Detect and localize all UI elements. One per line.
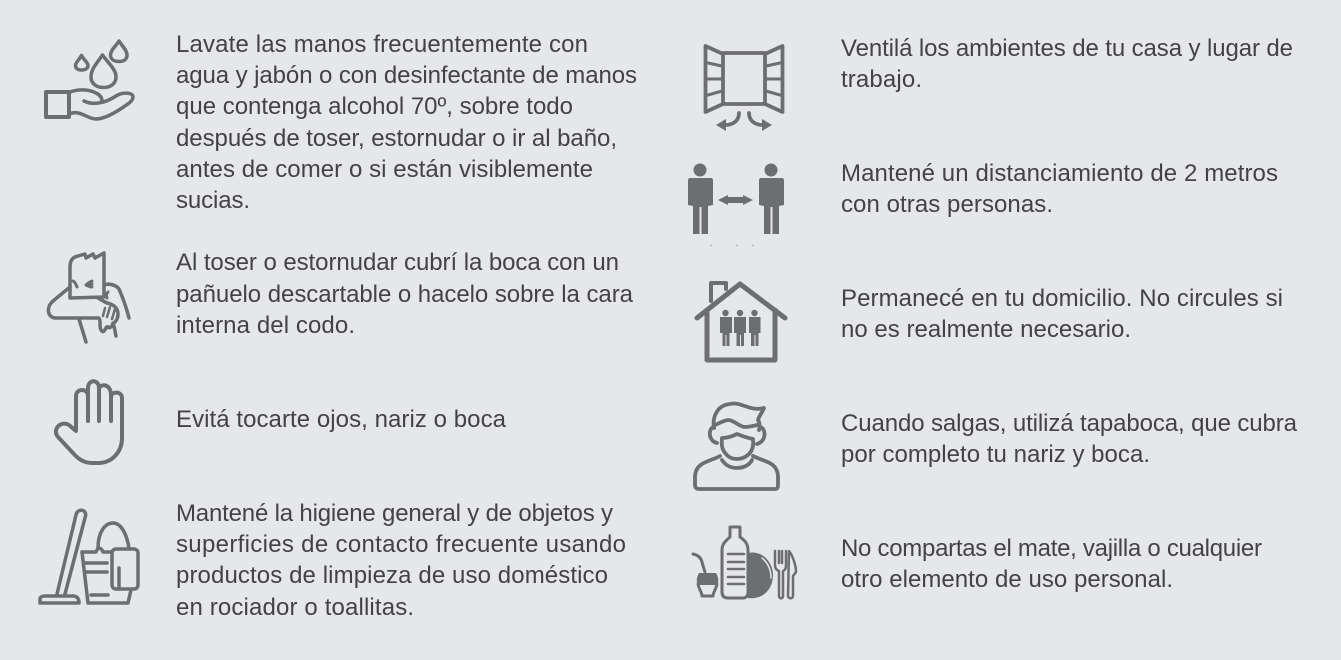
text: hand washing: Lavate las manos frecuentemente con — [176, 31, 588, 58]
text: coughing — [176, 249, 634, 339]
text: coughing: Al toser o estornudar cubrí la boca con un — [176, 249, 619, 276]
icon: hand washing with drops — [46, 41, 133, 119]
icon: mop and bucket — [40, 510, 138, 603]
text: hygiene: en rociador o toallitas. — [176, 594, 414, 621]
text: do not share — [841, 535, 1262, 593]
text: avoid touching face: Evitá tocarte ojos, nariz o boca — [176, 406, 507, 433]
text: hand washing — [176, 31, 637, 214]
icon: raised hand — [56, 381, 122, 463]
text: stay home: Permanecé en tu domicilio. No circules si — [841, 285, 1283, 312]
text: ventilation: trabajo. — [841, 66, 922, 93]
text: face mask: Cuando salgas, utilizá tapaboca, que cubra — [841, 410, 1298, 437]
text: hygiene: superficies de contacto frecuente usando — [176, 531, 626, 558]
icon: house with family — [697, 283, 785, 360]
text: do not share: otro elemento de uso personal. — [841, 566, 1173, 593]
text: distancing: Mantené un distanciamiento de 2 metros — [841, 160, 1278, 187]
text: face mask — [841, 410, 1298, 468]
icon: person wearing face mask — [695, 403, 778, 489]
text: hand washing: antes de comer o si están visiblemente — [176, 156, 593, 183]
text: do not share: No compartas el mate, vajilla o cualquier — [841, 535, 1262, 562]
text: hygiene — [176, 500, 626, 621]
icon: coughing into elbow — [48, 253, 129, 342]
text: hygiene: Mantené la higiene general y de objetos y — [176, 500, 613, 527]
text: distancing: con otras personas. — [841, 191, 1053, 218]
text: hand washing: sucias. — [176, 187, 250, 214]
icon: open window with air arrows — [706, 46, 782, 131]
text: coughing: pañuelo descartable o hacelo sobre la cara — [176, 281, 634, 308]
text: stay home: no es realmente necesario. — [841, 316, 1131, 343]
text: stay home — [841, 285, 1283, 343]
icon: mate, bottle, plate and cutlery — [693, 527, 796, 598]
icon: two people two metres apart — [688, 164, 784, 246]
text: ventilation — [841, 35, 1293, 93]
text: ventilation: Ventilá los ambientes de tu casa y lugar de — [841, 35, 1293, 62]
text: hand washing: agua y jabón o con desinfectante de manos — [176, 62, 637, 89]
text: hygiene: productos de limpieza de uso doméstico — [176, 562, 608, 589]
text: face mask: por completo tu nariz y boca. — [841, 441, 1150, 468]
text: hand washing: que contenga alcohol 70º, sobre todo — [176, 93, 573, 120]
text: hand washing: después de toser, estornudar o ir al baño, — [176, 125, 617, 152]
text: distancing — [841, 160, 1278, 218]
text: coughing: interna del codo. — [176, 312, 355, 339]
